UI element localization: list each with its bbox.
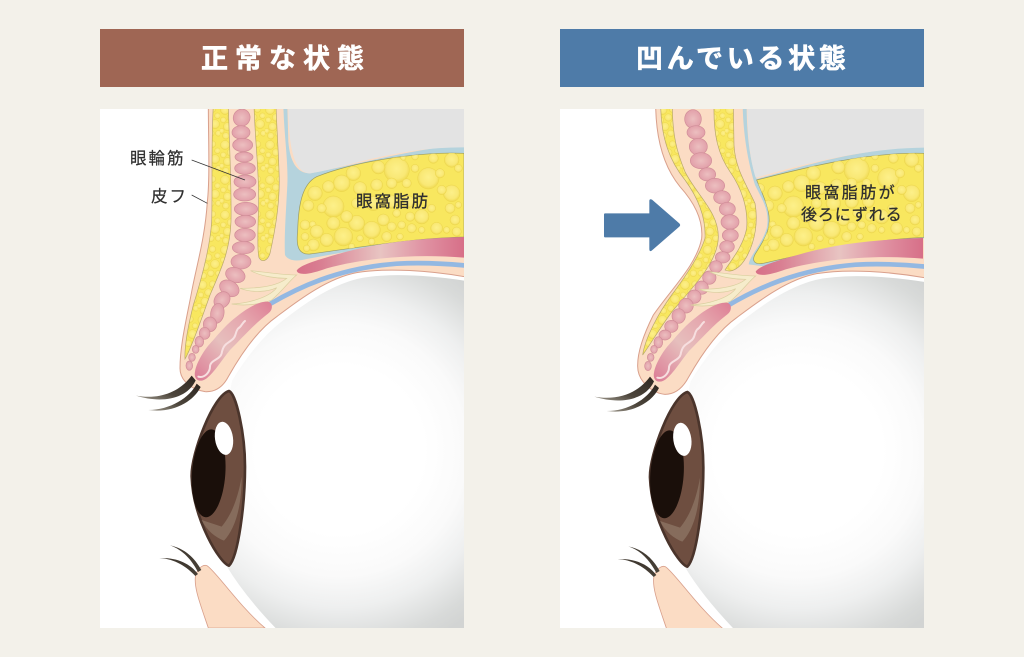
- displaced orbital fat pad: [754, 153, 924, 264]
- preseptal fat strip: [254, 105, 279, 261]
- skin cross-section: [638, 105, 930, 394]
- eyeball, iris, lashes and lower lid: [136, 274, 473, 638]
- orbital bone gray area: [747, 105, 924, 178]
- label: orbital fat: 眼窩脂肪: [356, 192, 430, 211]
- label: displaced orbital fat: [801, 184, 903, 224]
- orbital bone gray area: [288, 105, 464, 173]
- label: orbicularis muscle: 眼輪筋: [130, 149, 186, 168]
- orbital septum blue area: [283, 105, 464, 260]
- heading: sunken state: 凹んでいる状態: [636, 44, 850, 74]
- orbicularis muscle beads: [645, 110, 739, 371]
- label: displaced orbital fat: 眼窩脂肪が: [805, 184, 897, 202]
- skin cross-section: [180, 105, 470, 392]
- leader lines: [192, 160, 245, 203]
- levator, conjunctiva, fibers and tarsal plate: [654, 238, 926, 382]
- eyeball, iris, lashes and lower lid: [594, 275, 932, 639]
- heading: normal state: 正常な状態: [201, 44, 371, 74]
- levator, conjunctiva, fibers and tarsal plate: [195, 237, 467, 381]
- subcutaneous fat strip: [185, 105, 231, 359]
- orbital septum blue area: [743, 105, 924, 266]
- heading: normal state: [100, 29, 464, 87]
- label: displaced orbital fat: 後ろにずれる: [801, 206, 903, 224]
- label: skin: 皮フ: [151, 187, 188, 206]
- panel: sunken eyelid diagram: [560, 105, 932, 639]
- preseptal fat strip: [714, 105, 756, 271]
- arrow pointing at the sunken area: [604, 199, 680, 251]
- heading: sunken state: [560, 29, 924, 87]
- subcutaneous fat strip: [643, 105, 718, 355]
- orbicularis muscle beads: [186, 106, 258, 370]
- panel: normal eyelid diagram: [100, 105, 473, 638]
- orbital fat pad: [295, 153, 464, 254]
